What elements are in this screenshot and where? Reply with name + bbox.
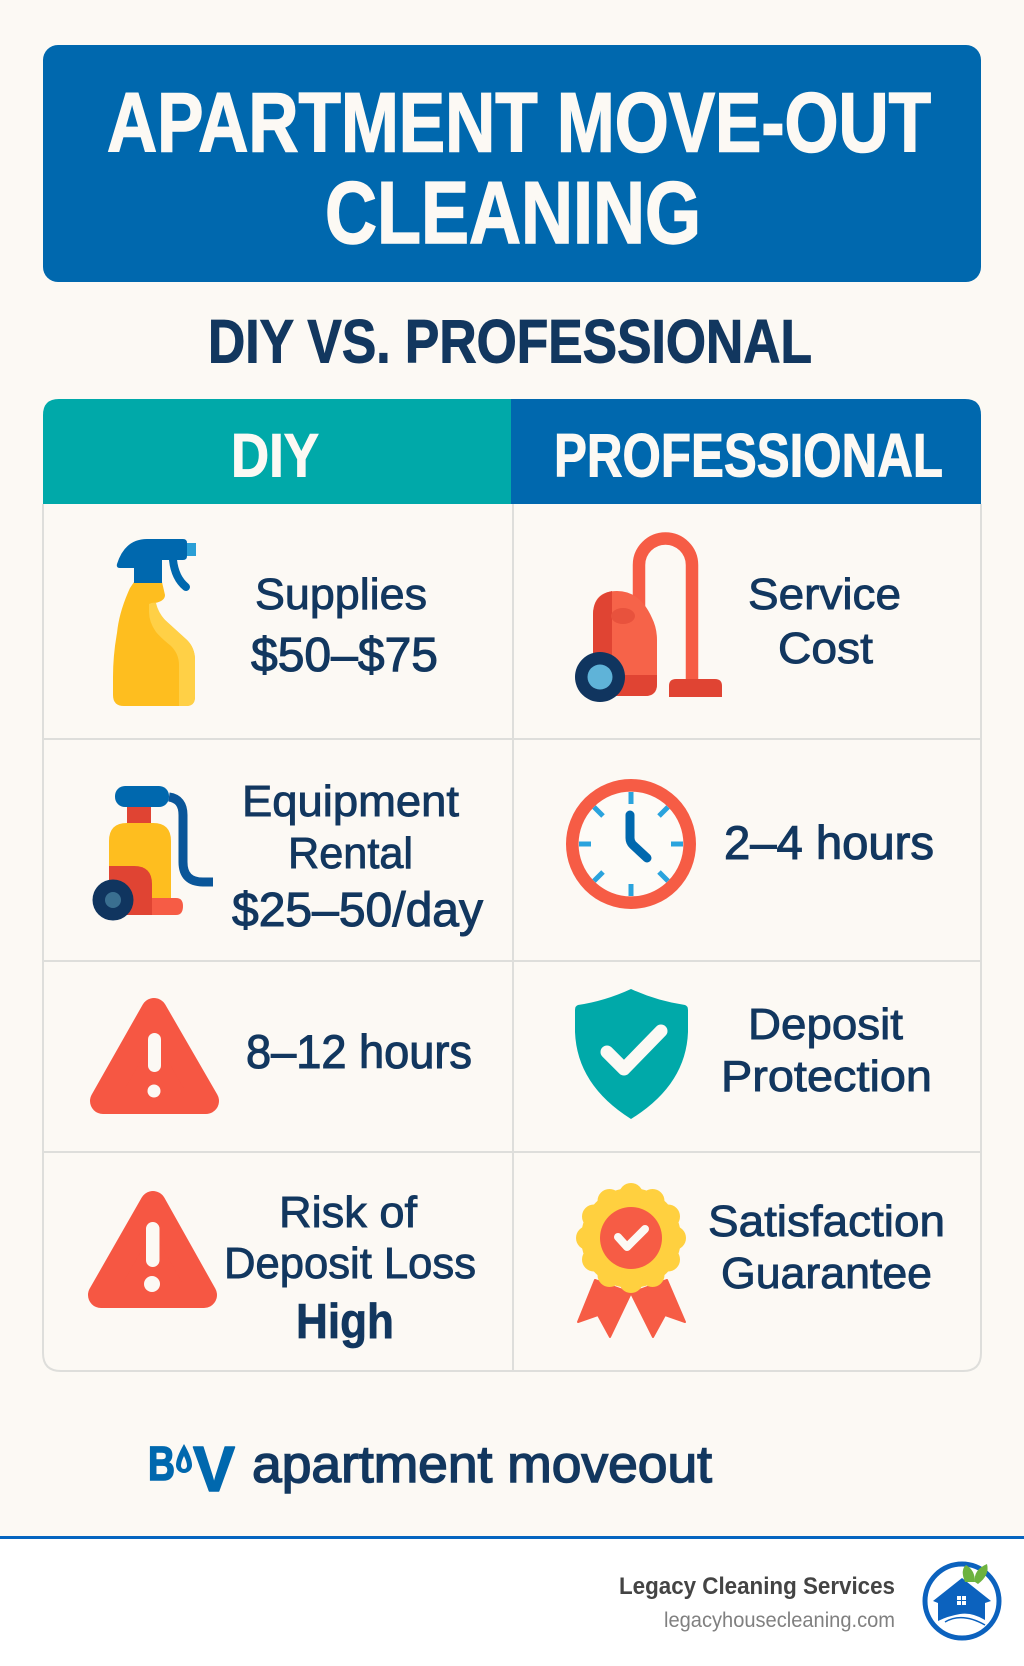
- text: satisfaction guarantee: Satisfaction: [708, 1197, 945, 1246]
- text: equipment rental: Rental: [288, 829, 413, 878]
- text: service cost: [748, 570, 901, 673]
- text: website: legacyhousecleaning.com: [664, 1609, 895, 1632]
- text: service cost: Service: [748, 570, 901, 619]
- icon: warning triangle high risk: [101, 1204, 204, 1295]
- column header: Professional: PROFESSIONAL: [554, 422, 943, 490]
- text: satisfaction guarantee: [708, 1197, 945, 1298]
- icon: clock: [572, 785, 690, 903]
- text: risk of deposit loss: [224, 1188, 476, 1349]
- keyword strip: BV logo and apartment moveout: [148, 1433, 713, 1505]
- text: service cost: Cost: [778, 624, 873, 673]
- text: equipment rental: [232, 777, 483, 937]
- text: supplies: $50–$75: [251, 629, 438, 682]
- panel: comparison table: [43, 399, 981, 1371]
- text: supplies: [251, 570, 438, 682]
- text: apartment moveout: apartment moveout: [252, 1436, 713, 1494]
- icon: BV drop logo: [148, 1433, 235, 1505]
- text: 2-4 hours: 2–4 hours: [724, 816, 934, 869]
- icon: Legacy Cleaning logo: [925, 1564, 999, 1638]
- column header: DIY: [43, 399, 511, 504]
- title banner: [43, 45, 981, 282]
- icon: shield with check: [575, 989, 688, 1119]
- text: 8-12 hours: 8–12 hours: [246, 1025, 472, 1078]
- table grid: [43, 504, 981, 1371]
- column header: Professional: [511, 399, 981, 504]
- icon: vacuum cleaner: [575, 538, 722, 702]
- icon: equipment rental machine: [92, 786, 213, 920]
- text: deposit protection: Deposit: [748, 1000, 903, 1049]
- icon: satisfaction rosette: [576, 1183, 686, 1337]
- text: equipment rental: $25–50/day: [232, 884, 483, 937]
- footer bar: [0, 1536, 1024, 1666]
- column header: DIY: DIY: [231, 422, 319, 490]
- text: risk of deposit loss: Deposit Loss: [224, 1239, 476, 1288]
- text: company name: Legacy Cleaning Services: [619, 1573, 895, 1600]
- icon: spray bottle: [113, 539, 196, 706]
- icon: BV drop logo: V: [193, 1433, 235, 1505]
- text: satisfaction guarantee: Guarantee: [721, 1249, 932, 1298]
- text: supplies: Supplies: [255, 570, 427, 619]
- text: deposit protection: [721, 1000, 932, 1101]
- text: risk of deposit loss: Risk of: [279, 1188, 418, 1237]
- icon: BV drop logo: B: [148, 1438, 175, 1491]
- icon: warning triangle: [103, 1011, 206, 1101]
- title banner: CLEANING: [325, 163, 701, 262]
- text: risk of deposit loss: High: [296, 1295, 394, 1349]
- subtitle: DIY VS. PROFESSIONAL: [208, 308, 812, 376]
- text: equipment rental: Equipment: [242, 777, 459, 826]
- text: deposit protection: Protection: [721, 1052, 932, 1101]
